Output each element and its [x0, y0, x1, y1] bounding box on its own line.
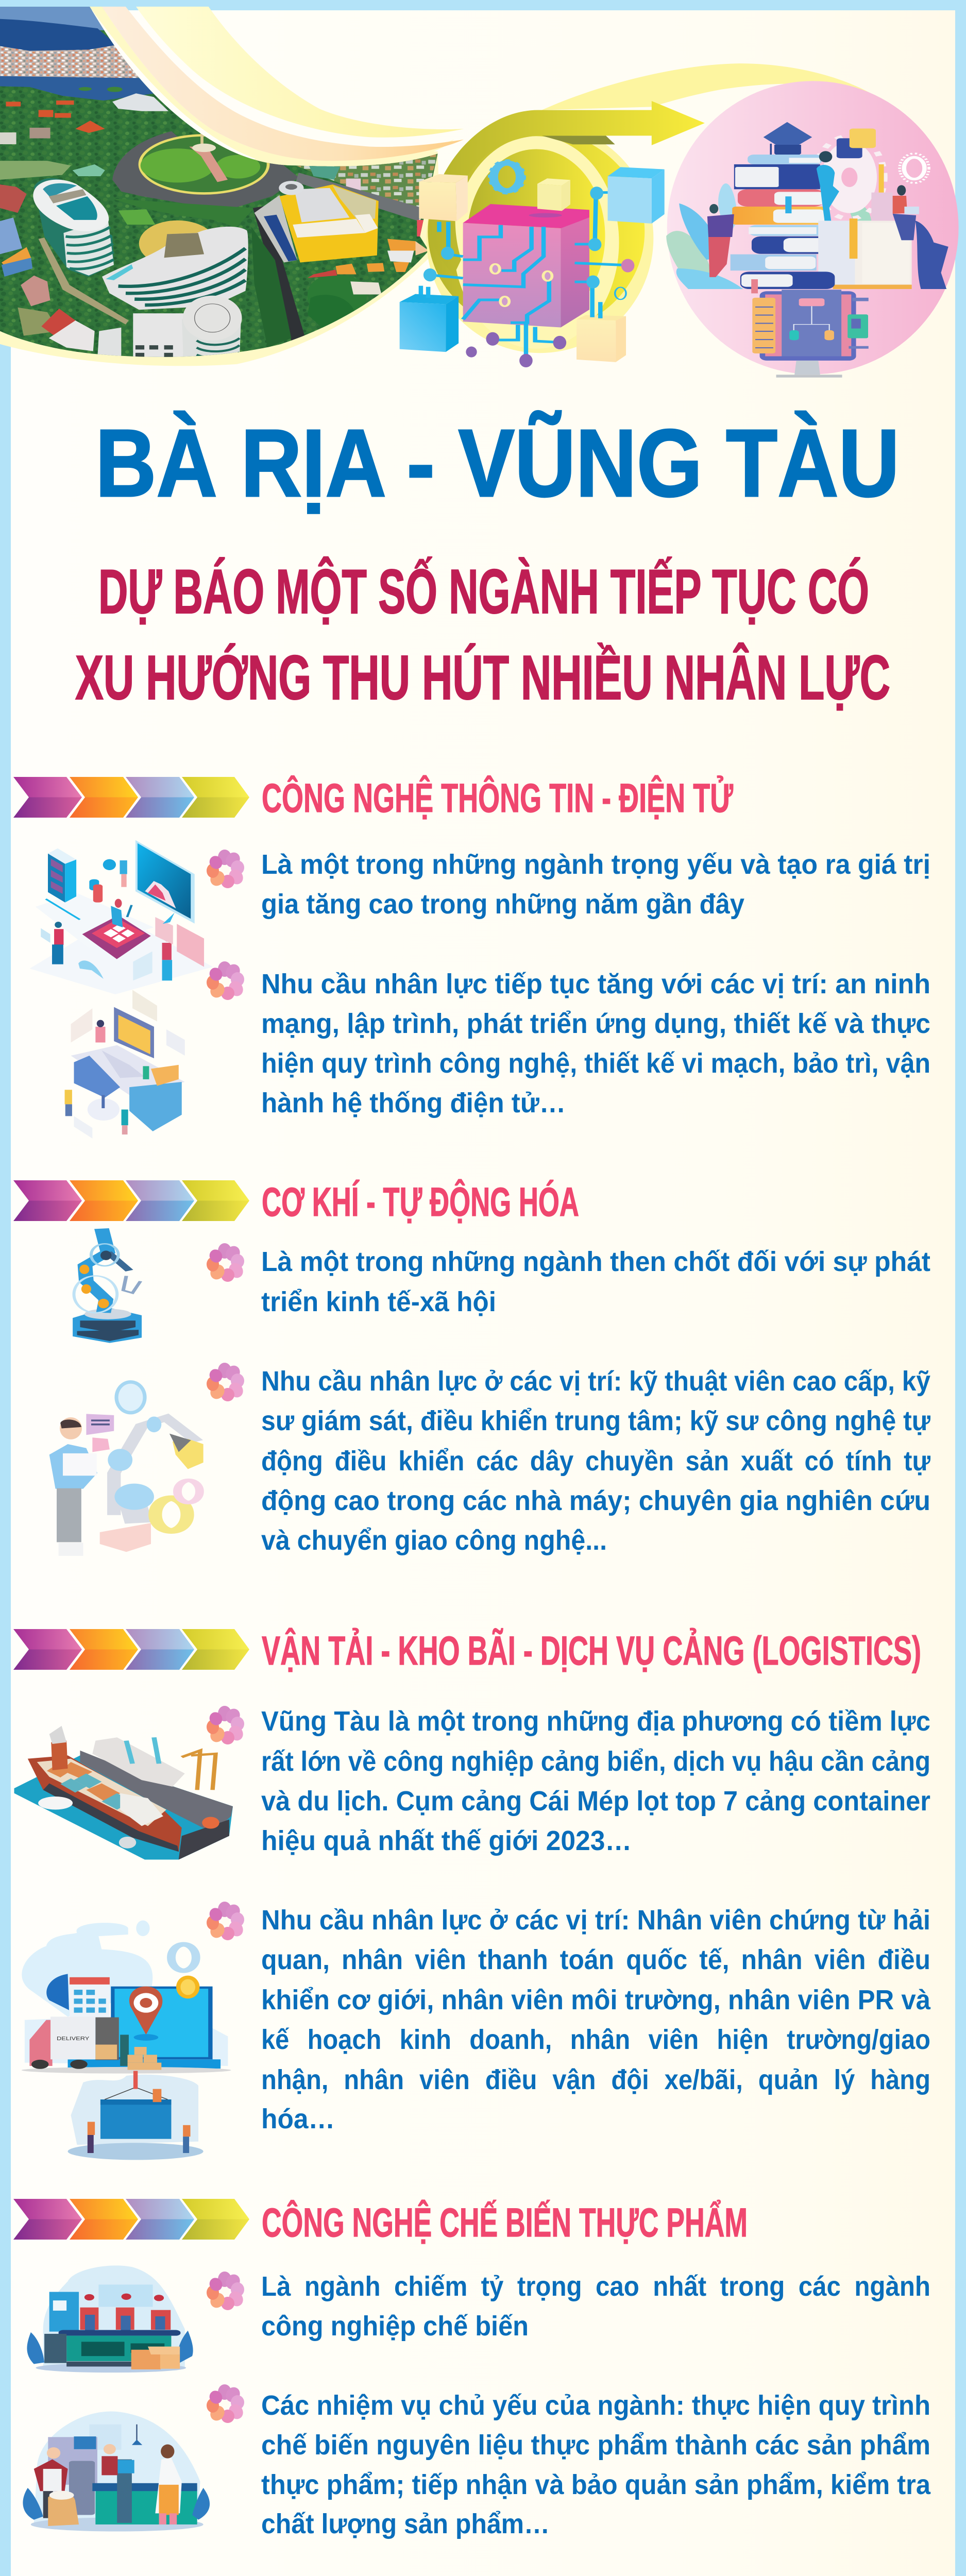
- section 1 text: Là một trong những ngành trọng yếu và tạo ra giá trị: [261, 849, 930, 880]
- section 3 text: hóa…: [261, 2104, 335, 2134]
- illustration: food factory line: [27, 2265, 193, 2372]
- section 2 text: và chuyển giao công nghệ...: [261, 1525, 607, 1556]
- section 3 heading: [13, 1628, 921, 1673]
- section 1 text: gia tăng cao trong những năm gần đây: [261, 889, 744, 920]
- illustration: isometric IT team with chip: [29, 840, 213, 994]
- rotating yellow ring and arrow: [427, 63, 870, 353]
- section 4 bullets: [207, 2272, 246, 2424]
- illustration: container ship at port: [14, 1726, 233, 1859]
- section 1 text: hành hệ thống điện tử…: [261, 1088, 566, 1118]
- section 3 text: khiển cơ giới, nhân viên môi trường, nhân viên PR và: [261, 1985, 931, 2015]
- section 3 text: và du lịch. Cụm cảng Cái Mép lọt top 7 cảng container: [261, 1786, 930, 1817]
- section 3 bullets: [207, 1706, 246, 1941]
- monitor with flow chart: [752, 290, 869, 378]
- section 3 text: Nhu cầu nhân lực ở các vị trí: Nhân viên chứng từ hải: [261, 1905, 930, 1936]
- section 3 text: hiệu quả nhất thế giới 2023…: [261, 1825, 632, 1856]
- section 4 text: công nghiệp chế biến: [261, 2311, 529, 2342]
- subtitle: [75, 556, 890, 713]
- section 1 bullets: [207, 850, 246, 1001]
- people reading and climbing: [707, 151, 919, 277]
- plants: [666, 183, 948, 289]
- illustration: engineer and robot arm with gears: [49, 1380, 204, 1556]
- section 1 text: Nhu cầu nhân lực tiếp tục tăng với các vị trí: an ninh: [261, 969, 930, 999]
- section 4 text: [261, 2271, 931, 2539]
- aerial photo of Vung Tau: [0, 7, 444, 361]
- illustration: programming workstation: [65, 990, 185, 1139]
- section 2 heading: [13, 1179, 579, 1225]
- section 2 heading: CƠ KHÍ - TỰ ĐỘNG HÓA: [262, 1179, 579, 1225]
- section 4 text: thực phẩm; tiếp nhận và bảo quản sản phẩm, kiểm tra: [261, 2469, 931, 2500]
- section 3 text: [261, 1706, 931, 2134]
- section 1 text: [261, 849, 930, 1118]
- stacked books: [731, 122, 912, 293]
- section 2 text: động cao trong các nhà máy; chuyên gia nghiên cứu: [261, 1485, 930, 1516]
- section 2 text: triển kinh tế-xã hội: [261, 1286, 496, 1317]
- section 2 bullets: [207, 1243, 246, 1402]
- gears and speech bubbles: [815, 128, 929, 218]
- circuit block: [421, 178, 634, 367]
- technology chip, arrow and books artwork: [400, 63, 959, 378]
- illustration: robot arm: [73, 1229, 142, 1343]
- cubes: [400, 160, 665, 362]
- section 2 text: sư giám sát, điều khiển trung tâm; kỹ sư công nghệ tự: [261, 1405, 931, 1436]
- ribbons around the photo: [0, 7, 464, 366]
- section 1 heading: CÔNG NGHỆ THÔNG TIN - ĐIỆN TỬ: [262, 775, 733, 821]
- section 1 text: mạng, lập trình, phát triển ứng dụng, thiết kế và thực: [261, 1008, 930, 1039]
- section 4 heading: CÔNG NGHỆ CHẾ BIẾN THỰC PHẨM: [262, 2199, 748, 2245]
- illustration: food processing staff: [23, 2412, 210, 2532]
- section 1 text: hiện quy trình công nghệ, thiết kế vi mạch, bảo trì, vận: [261, 1048, 930, 1079]
- section 4 heading: [13, 2199, 748, 2245]
- section 3 text: quan, nhân viên thanh toán quốc tế, nhân viên điều: [261, 1944, 930, 1975]
- pink circle with books and monitor: [666, 81, 959, 378]
- header photo with ribbons: [0, 7, 464, 366]
- section 3 text: Vũng Tàu là một trong những địa phương có tiềm lực: [261, 1706, 930, 1737]
- section 4 text: Các nhiệm vụ chủ yếu của ngành: thực hiện quy trình: [261, 2390, 930, 2421]
- section 2 text: [261, 1246, 931, 1556]
- section 4 text: chế biến nguyên liệu thực phẩm thành các sản phẩm: [261, 2430, 930, 2461]
- section 4 text: chất lượng sản phẩm…: [261, 2509, 550, 2539]
- section 2 text: Là một trong những ngành then chốt đối với sự phát: [261, 1246, 930, 1277]
- illustration: delivery logistics scene: [22, 1920, 231, 2160]
- section 1 heading: [13, 775, 733, 821]
- illustration: delivery logistics scene: DELIVERY: [57, 2036, 89, 2042]
